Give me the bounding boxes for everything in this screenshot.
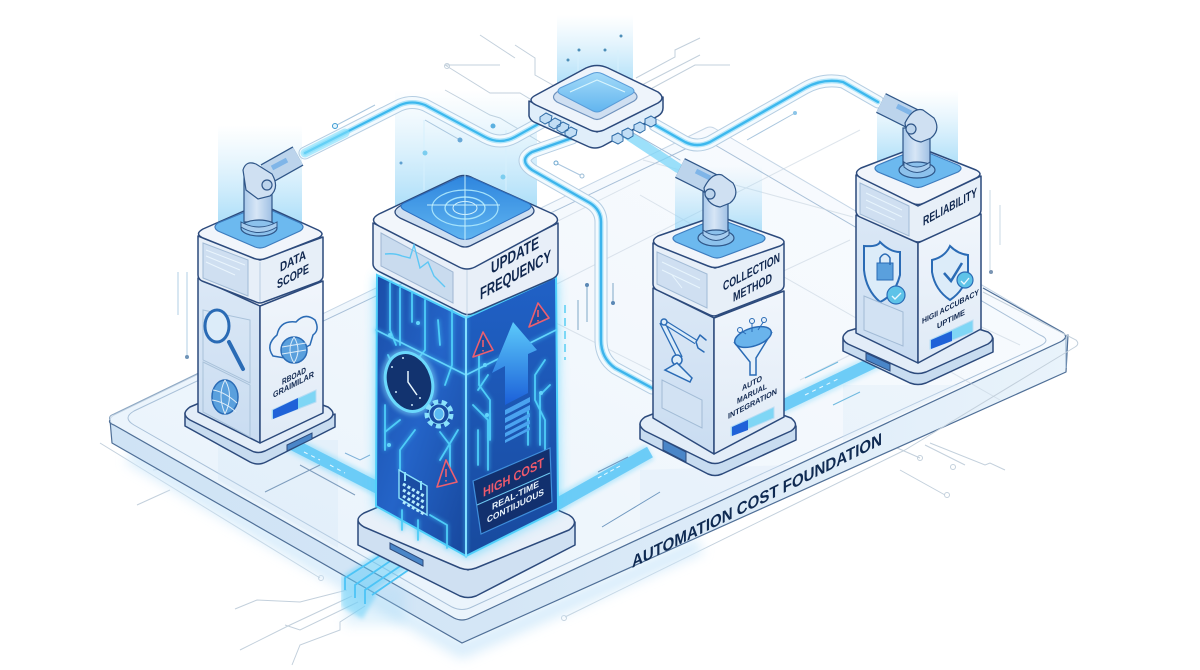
- pillar label: UPDATE: [491, 232, 539, 278]
- hub screen well: [554, 74, 637, 120]
- pipe: hub to collection method side: [525, 138, 652, 388]
- status bar: [930, 320, 973, 349]
- pipe: hub to reliability: [655, 81, 878, 145]
- platform front rim: [110, 335, 1068, 643]
- background circuit traces: [100, 35, 1005, 665]
- pillar label: RELIABILITY: [923, 184, 977, 229]
- pillar cap faces: [198, 236, 323, 303]
- pillar right face: [466, 277, 558, 556]
- pillar: data scope: [185, 145, 335, 464]
- pillar left face: [376, 275, 466, 556]
- link: collection method to reliability: [780, 357, 885, 407]
- hub port connectors: [540, 113, 656, 144]
- icon: warning triangle left face: [437, 460, 457, 487]
- pillar cap faces: [653, 243, 784, 316]
- base port: [866, 353, 890, 371]
- data pipes: [305, 81, 878, 388]
- pillar: collection method: [640, 168, 796, 476]
- platform right glass edge: [1065, 337, 1067, 368]
- pillar label: SCOPE: [277, 260, 309, 292]
- base port: [663, 440, 686, 462]
- pillar: update frequency (highlighted): [358, 170, 575, 598]
- panel icon lines: [662, 380, 702, 428]
- light columns above the pillars: [218, 15, 958, 240]
- icon: clock with gear: [373, 341, 451, 426]
- status text: MARUAL: [737, 381, 767, 406]
- callout: high cost: REAL-TIME: [492, 479, 539, 513]
- pillar body faces: [653, 288, 714, 454]
- callout: high cost: HIGH COST: [483, 455, 544, 500]
- robot arm: [241, 145, 313, 236]
- pipe: hub to collection arm: [628, 130, 680, 168]
- status text: HIGII ACCUBACY: [922, 287, 979, 326]
- callout: high cost: [473, 448, 552, 534]
- circuit traces on faces: [376, 283, 556, 556]
- pillar label: DATA: [280, 246, 306, 275]
- soft wash under platform edge: [130, 455, 700, 650]
- status bar: [272, 390, 316, 419]
- icon: warning triangle right top: [529, 303, 549, 327]
- icon: shield with check: [932, 246, 973, 300]
- base port: [287, 433, 312, 451]
- robot arm: [680, 168, 736, 246]
- body glow: [376, 275, 558, 556]
- faint light bands on the floor: [218, 385, 963, 625]
- pillar top well: [673, 219, 765, 258]
- hub: central connector chip: [529, 66, 663, 148]
- icon: magnifying glass: [205, 310, 243, 369]
- slot: [390, 543, 423, 566]
- link: update frequency to collection method: [552, 452, 660, 527]
- pillar label: COLLECTION: [723, 249, 780, 294]
- icon: shield with padlock: [864, 242, 905, 304]
- pillar body faces: [198, 278, 260, 443]
- pillar: reliability: [843, 103, 993, 384]
- pillar body faces: [856, 215, 918, 363]
- icon: warning triangle right face: [473, 332, 493, 357]
- pillar top screen: [395, 170, 534, 247]
- panel icon lines: [864, 296, 903, 346]
- pillar base: [185, 413, 335, 464]
- callout: high cost: CONTIIJUOUS: [487, 487, 544, 526]
- panel: foundation platform: [110, 127, 1078, 643]
- icon: calendar: [399, 470, 427, 515]
- pillar base: [640, 424, 796, 476]
- status text: RBOAD: [282, 365, 306, 387]
- icon: cloud and globe: [270, 316, 317, 363]
- hub body: [529, 97, 663, 148]
- pillar label: METHOD: [733, 270, 772, 305]
- pillar top well: [875, 150, 961, 188]
- pillar label: [723, 249, 780, 305]
- platform top surface: [110, 127, 1066, 620]
- small signal nodes near pipes: [178, 105, 1000, 360]
- icon: robot arm: [661, 319, 706, 382]
- icon: globe left: [212, 380, 238, 414]
- status text: INTEGRATION: [728, 386, 777, 421]
- platform label: AUTOMATION COST FOUNDATION: [632, 429, 882, 572]
- pillar label: [277, 246, 309, 292]
- robot arm: [881, 103, 937, 178]
- status text: UPTIME: [937, 307, 965, 331]
- status text: AUTO: [742, 373, 762, 393]
- pipe: data scope to hub: [305, 102, 542, 153]
- status text: GRAIMILAR: [273, 369, 314, 400]
- pillar base: [843, 338, 993, 384]
- icon: funnel: [732, 318, 774, 375]
- pillar top well: [215, 207, 303, 248]
- link: update frequency down over platform edge: [345, 548, 420, 606]
- pillar label: FREQUENCY: [480, 245, 551, 304]
- icon: up arrow: [492, 322, 537, 443]
- status bar: [731, 407, 774, 436]
- pillar cap: [373, 176, 558, 315]
- pillar base: [358, 521, 575, 598]
- floor data links: [265, 357, 885, 606]
- side panel outlines: [203, 310, 250, 437]
- pillar cap faces: [856, 175, 981, 242]
- link: data scope to update frequency: [265, 443, 382, 495]
- pillar label: [480, 232, 551, 304]
